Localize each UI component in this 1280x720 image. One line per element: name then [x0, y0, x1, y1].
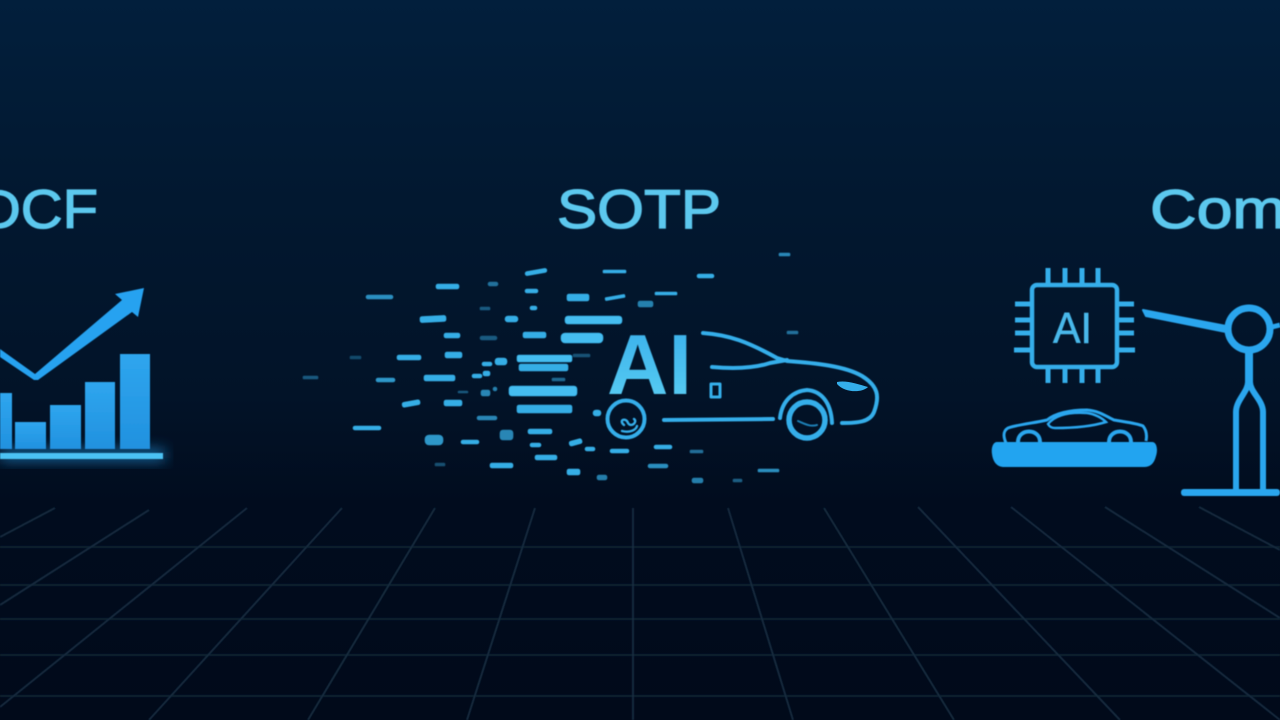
- headlight: [837, 381, 868, 391]
- panel: Comps: [992, 178, 1280, 496]
- panel: SOTP: [303, 178, 877, 483]
- car outline: [608, 333, 877, 438]
- roof and hood: [703, 333, 877, 423]
- rear wheel: [608, 400, 644, 438]
- side sill: [664, 419, 773, 420]
- window sill: [712, 360, 787, 368]
- car body: [1004, 410, 1147, 443]
- data fragments dissolving into car: [303, 253, 798, 483]
- chart bars: [0, 354, 150, 449]
- platform: [992, 442, 1157, 467]
- rear wheel detail: [622, 419, 637, 432]
- scale right arm: [1272, 325, 1280, 327]
- chart baseline: [0, 453, 163, 459]
- scale stand: [1236, 352, 1263, 490]
- car window: [1048, 413, 1106, 428]
- scale pivot: [1228, 308, 1270, 350]
- icon: balance scale: [1143, 308, 1280, 496]
- car wheels: [1018, 432, 1131, 442]
- icon: small car on platform: [992, 410, 1157, 467]
- AI lettering: AI: [607, 318, 692, 413]
- panel: DCF: [0, 178, 165, 460]
- scale left arm: [1143, 310, 1226, 332]
- wheel arch: [780, 390, 832, 423]
- baseline glow: [0, 450, 165, 460]
- heading: SOTP: SOTP: [557, 178, 721, 240]
- door handle: [711, 384, 720, 397]
- perspective floor grid: [0, 507, 1280, 720]
- scale base: [1181, 489, 1280, 496]
- front wheel: [789, 402, 825, 438]
- front wheel detail: [798, 421, 817, 426]
- bar chart with rising arrow: [0, 288, 165, 460]
- icon: AI chip: [1014, 268, 1135, 383]
- rising arrow: [0, 288, 144, 380]
- chip AI label: AI: [1053, 304, 1092, 353]
